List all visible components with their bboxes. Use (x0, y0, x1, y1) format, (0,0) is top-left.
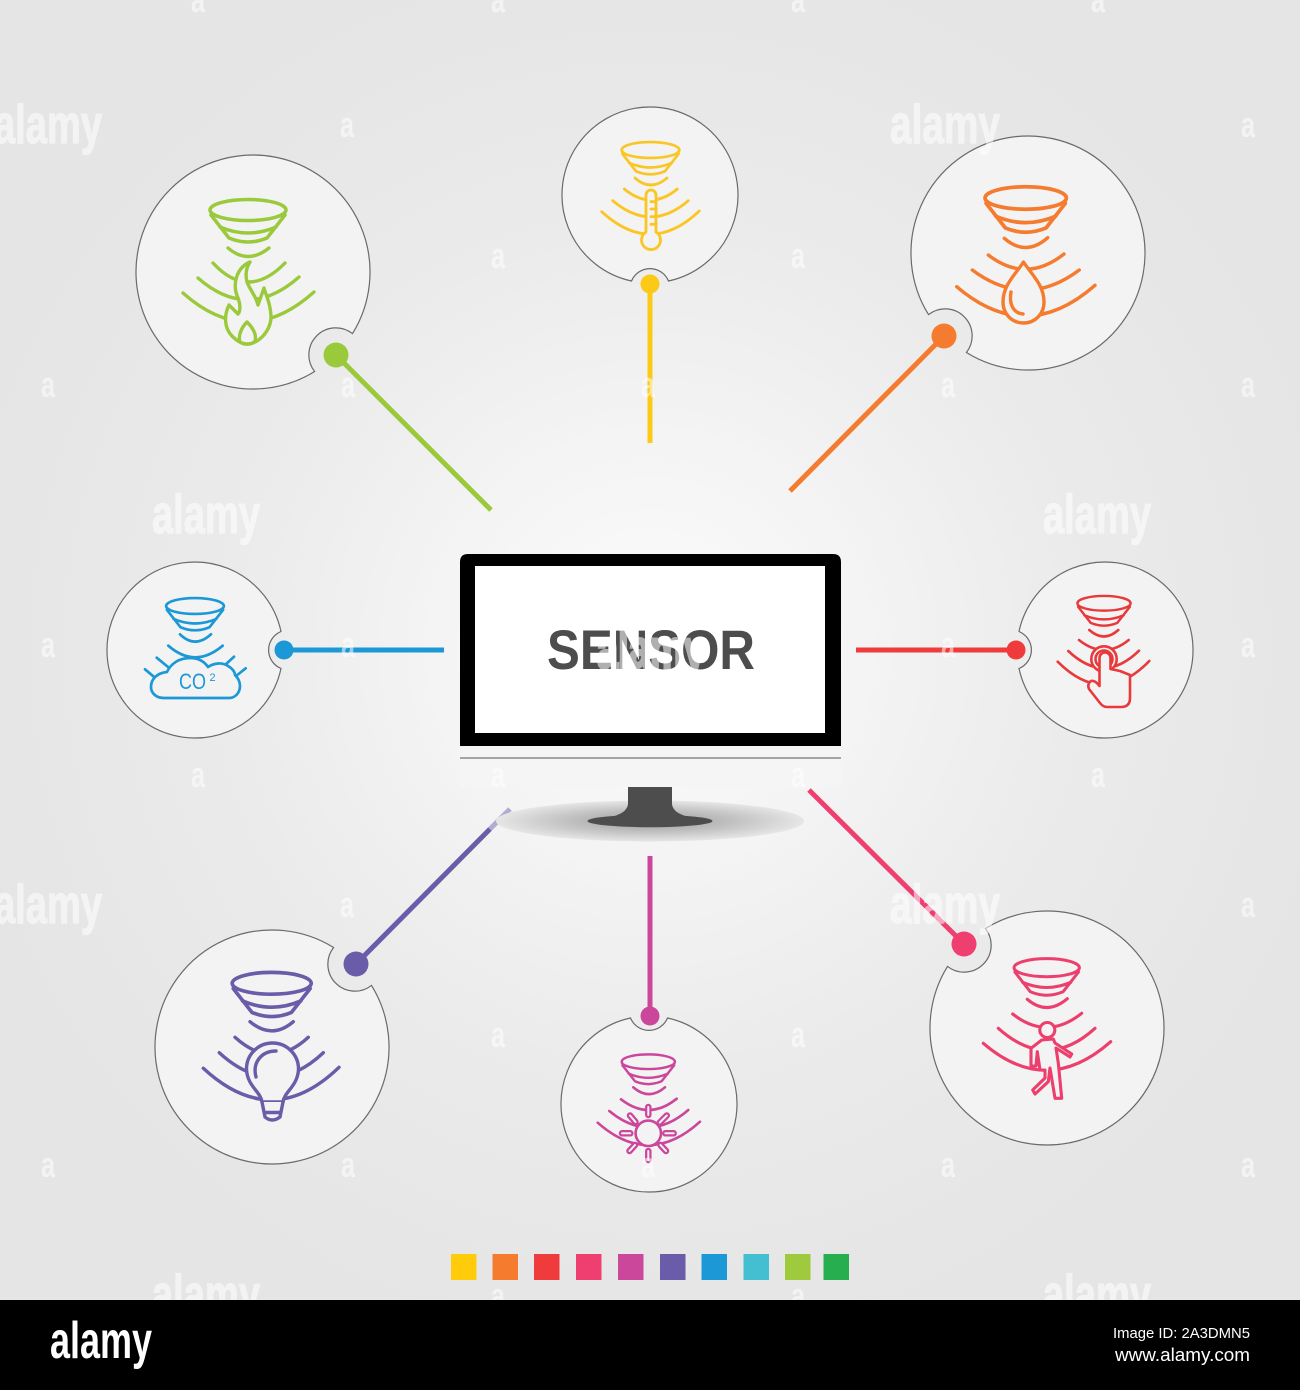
icon: CO2 cloud sensor (145, 598, 246, 698)
monitor bezel (460, 554, 841, 746)
watermarks: a (1241, 624, 1256, 665)
footer bar (0, 1300, 1300, 1390)
watermarks: alamy (597, 618, 705, 680)
notched circle: temperature (562, 107, 738, 281)
connector: bulb (344, 809, 510, 976)
monitor chin (460, 746, 841, 787)
panel: water sensor (865, 88, 1193, 416)
watermarks: a (641, 1144, 656, 1185)
notched circle: touch (1019, 562, 1193, 738)
watermarks: a (41, 624, 56, 665)
icon: CO2 cloud sensor: 2 (210, 672, 216, 684)
connector: temperature (640, 274, 660, 443)
panel: temperature sensor (562, 107, 738, 281)
panel: light bulb sensor (107, 884, 435, 1212)
connector: motion (809, 790, 976, 956)
icon: touch sensor (1058, 596, 1149, 707)
panel: light sensor (561, 1018, 737, 1192)
watermarks: a (791, 235, 806, 276)
monitor (460, 554, 841, 842)
connector: touch (856, 640, 1026, 660)
watermarks: a (191, 754, 206, 795)
watermarks: a (791, 1275, 806, 1316)
watermarks: a (341, 1144, 356, 1185)
icon: CO2 cloud sensor: CO (179, 669, 206, 694)
colour swatches (451, 1254, 849, 1280)
watermarks: a (41, 364, 56, 405)
connector: water (790, 324, 956, 491)
footer image id: Image ID: 2A3DMN5 (1113, 1325, 1250, 1342)
monitor stand (588, 787, 712, 827)
watermarks: alamy (890, 873, 1000, 935)
icon: walking person sensor (983, 959, 1111, 1098)
watermarks: alamy (1043, 1263, 1151, 1325)
watermarks: a (1241, 364, 1256, 405)
footer logo: alamy (50, 1312, 152, 1370)
watermarks: a (1241, 104, 1256, 145)
watermarks: a (941, 1144, 956, 1185)
watermarks: a (791, 1014, 806, 1055)
watermarks: a (1241, 884, 1256, 925)
title: SENSOR: SENSOR (547, 618, 755, 681)
watermarks: alamy (890, 93, 1000, 155)
notched circle: light (561, 1018, 737, 1192)
watermarks: a (340, 104, 355, 145)
panel: CO2 sensor (107, 562, 281, 738)
watermarks: alamy (152, 1263, 260, 1325)
watermarks: a (1091, 754, 1106, 795)
monitor shadow (496, 800, 804, 842)
connector: fire (324, 342, 491, 510)
watermarks: a (341, 624, 356, 665)
watermarks: a (41, 1144, 56, 1185)
watermarks: a (641, 364, 656, 405)
monitor screen (475, 566, 825, 733)
watermarks: a (491, 235, 506, 276)
footer url: www.alamy.com (1114, 1345, 1250, 1365)
connector: light (640, 856, 660, 1026)
watermarks: a (1241, 1144, 1256, 1185)
watermarks: a (941, 624, 956, 665)
notched circle: water (865, 88, 1193, 416)
icon: thermometer sensor (602, 142, 699, 250)
watermarks: alamy (152, 483, 260, 545)
notched circle: fire (88, 107, 416, 435)
panel: touch sensor (1019, 562, 1193, 738)
icon: water drop sensor (957, 187, 1095, 323)
notched circle: CO2 (107, 562, 281, 738)
watermarks: a (491, 754, 506, 795)
connector: CO2 (274, 640, 444, 660)
watermarks: a (941, 364, 956, 405)
watermarks: a (791, 754, 806, 795)
panel: motion sensor (884, 865, 1212, 1193)
watermarks: alamy (1043, 483, 1151, 545)
watermarks: a (341, 364, 356, 405)
watermarks: a (491, 1275, 506, 1316)
notched circle: bulb (107, 884, 435, 1212)
icon: light bulb sensor (203, 972, 339, 1120)
icon: fire sensor (183, 200, 314, 344)
watermarks: a (491, 1014, 506, 1055)
watermarks: a (340, 884, 355, 925)
panel: fire sensor (88, 107, 416, 435)
icon: sun sensor (598, 1054, 700, 1160)
notched circle: motion (884, 865, 1212, 1193)
